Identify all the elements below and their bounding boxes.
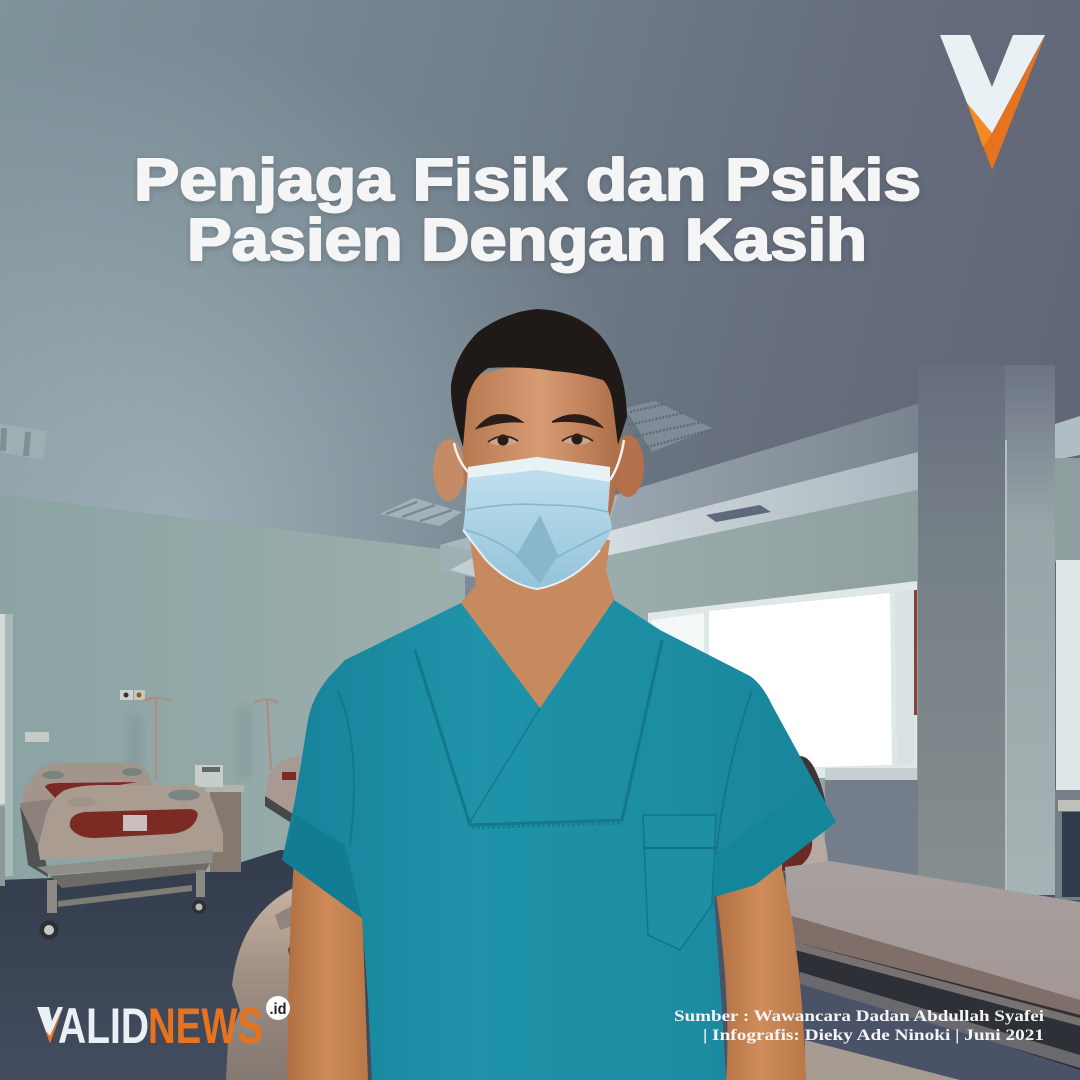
logo: VALIDNEWS.id [37, 996, 290, 1054]
sleeve cuffs [282, 815, 362, 918]
bedside cabinet [195, 765, 244, 872]
wall below window [825, 780, 918, 875]
arms [287, 860, 806, 1080]
right back wall [600, 490, 918, 880]
eyebrows [477, 415, 602, 428]
face [463, 365, 618, 590]
head: ears [433, 435, 644, 501]
big window [648, 581, 917, 780]
nurse figure [282, 309, 836, 1080]
hair [451, 309, 627, 447]
right side wall and window [1055, 416, 1080, 900]
ceiling vents [0, 401, 771, 526]
logo: V mark top right [940, 35, 1045, 170]
scrub top [282, 600, 836, 1080]
back bed left [23, 763, 152, 835]
source credits: Sumber : Wawancara Dadan Abdullah Syafei [674, 1008, 1045, 1025]
pillar [918, 365, 1055, 895]
front bed left [20, 785, 223, 940]
shadow on wall [128, 715, 142, 775]
wall sockets and switch [25, 690, 145, 742]
collar seam [415, 640, 662, 825]
ceiling beam [440, 404, 918, 578]
left door frame [0, 614, 13, 876]
title: Penjaga Fisik dan Psikis [134, 147, 921, 213]
title: Pasien Dengan Kasih [187, 207, 867, 273]
neck [458, 540, 616, 715]
surgical mask [454, 440, 624, 589]
middle bed headboard behind nurse [265, 756, 300, 826]
left wall [0, 495, 465, 880]
source credits: | Infografis: Dieky Ade Ninoki | Juni 2021 [703, 1027, 1044, 1044]
source credits [674, 1008, 1045, 1044]
title [134, 147, 921, 273]
pocket [643, 815, 716, 950]
logo: VALIDNEWS.id: NEWS [148, 998, 263, 1054]
right foreground bed [780, 756, 1080, 1080]
logo: VALIDNEWS.id: .id [270, 1001, 286, 1018]
eyes [488, 434, 593, 446]
logo: VALIDNEWS.id: ALID [58, 998, 149, 1054]
floor [0, 850, 470, 1080]
lower foreground bed headboard [226, 884, 310, 1080]
IV poles [143, 698, 279, 780]
